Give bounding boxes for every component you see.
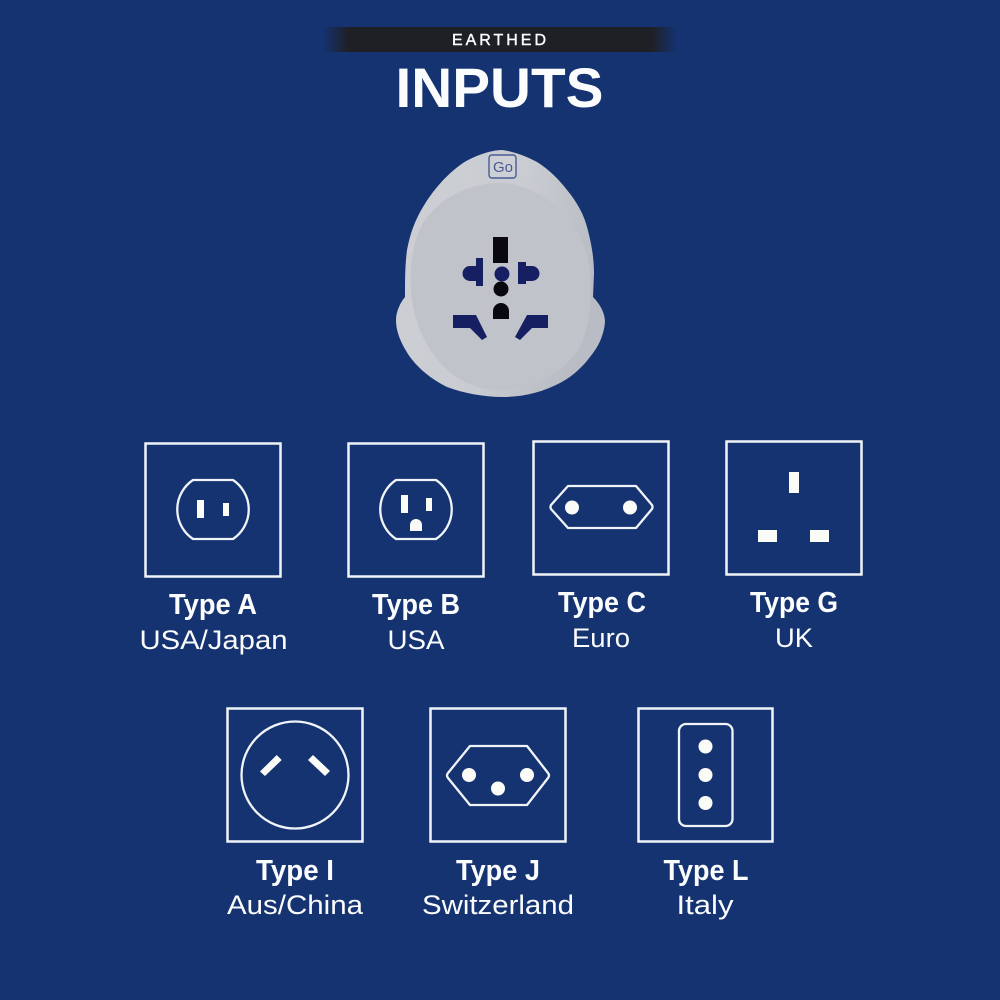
icon: Go logo: Go [493,159,513,176]
label J: Type J [456,855,540,887]
icon: universal socket adapter [396,150,605,397]
label B: Type B [372,589,460,621]
banner: earthed [323,27,677,52]
label I: Type I [256,855,334,887]
banner: earthed: EARTHED [452,32,546,49]
socket outline B [380,480,452,539]
socket outline C [550,486,652,528]
label G: UK [775,623,813,653]
label A [140,589,288,655]
socket outline J [447,746,549,805]
plug type B [348,444,484,655]
label L: Type L [664,855,748,887]
icon: Go logo [489,155,516,178]
label J [422,855,574,920]
socket holes [453,237,548,340]
label C: Type C [558,587,646,619]
plug type I [227,708,364,920]
label A: USA/Japan [140,625,288,655]
label G: Type G [750,587,838,619]
label I: Aus/China [227,890,364,920]
label B [372,589,460,655]
label J: Switzerland [422,890,574,920]
plug type A [140,444,288,655]
label G [750,587,838,653]
plug type C [534,442,668,653]
label L [664,855,748,920]
label A: Type A [169,589,257,621]
plug type G [726,442,862,653]
plug type J [422,708,574,920]
label B: USA [388,625,444,655]
label L: Italy [676,890,734,920]
label I [227,855,364,920]
socket outline A [177,480,249,539]
title: INPUTS [396,56,604,119]
label C: Euro [572,623,630,653]
plug type L [638,708,772,920]
label C [558,587,646,653]
